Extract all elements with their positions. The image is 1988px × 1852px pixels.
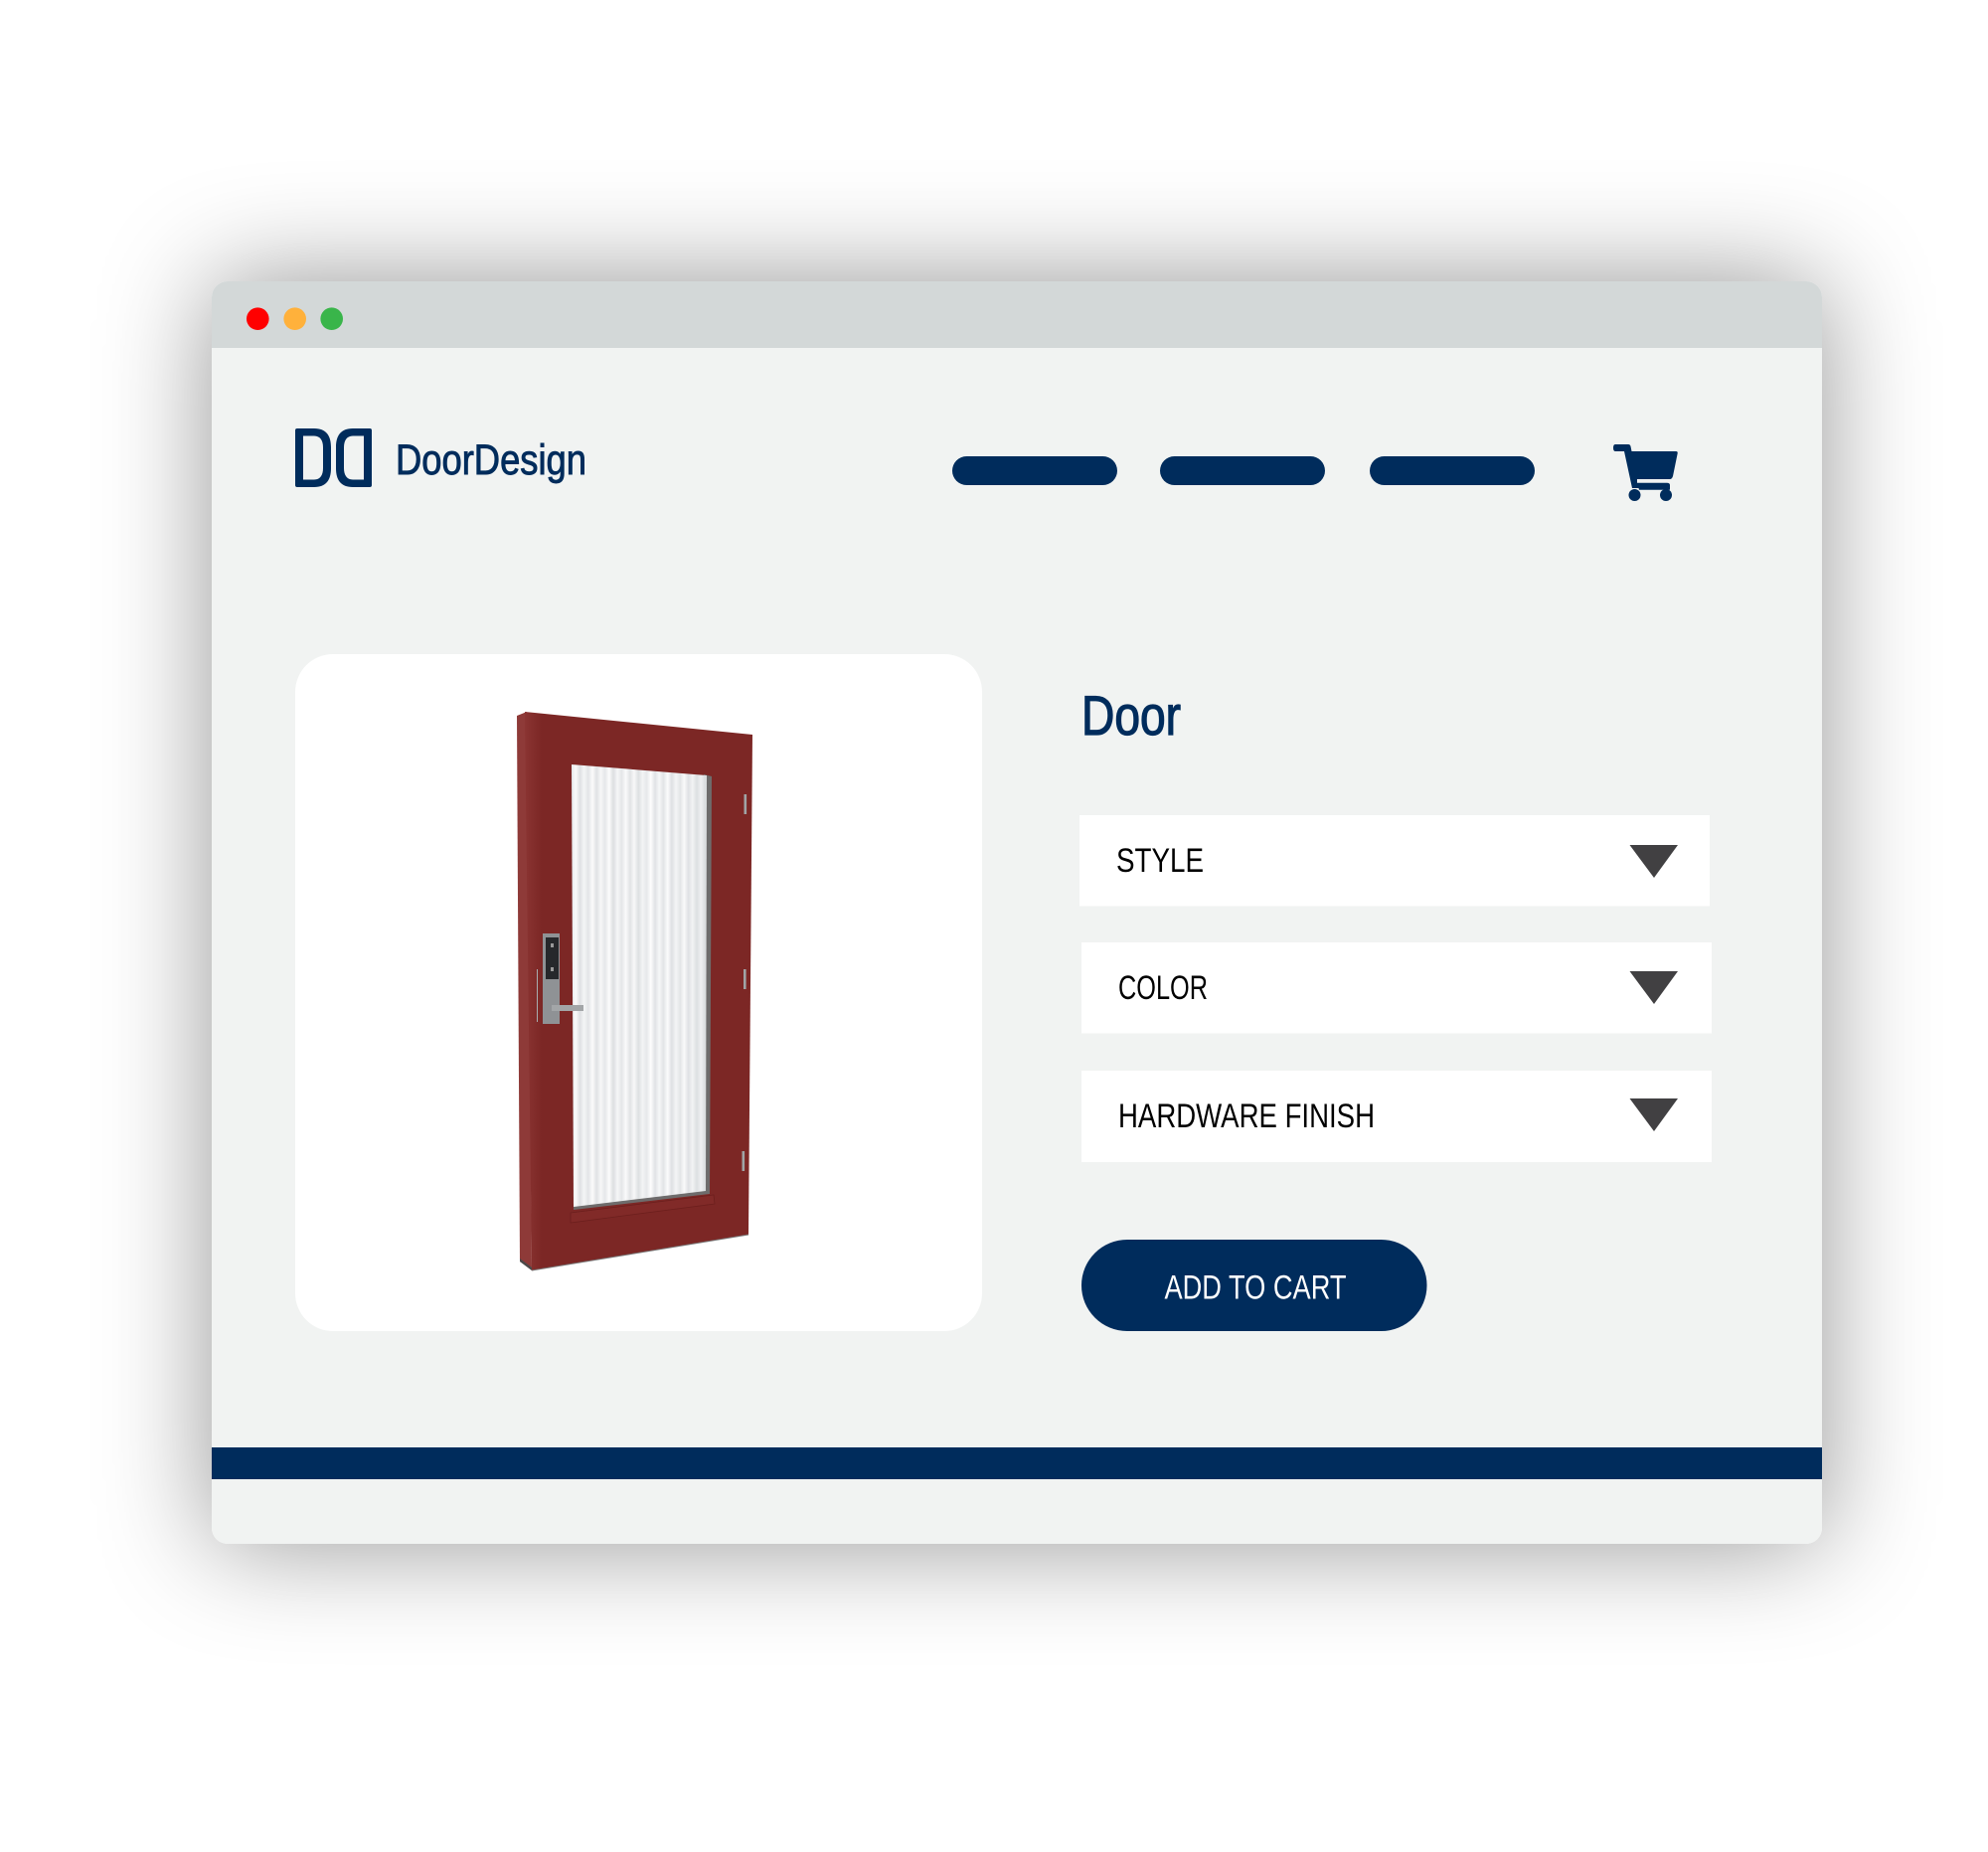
door illustration — [517, 712, 752, 1270]
footer bar — [212, 1447, 1822, 1479]
dropdown: hardware finish — [1081, 1071, 1712, 1162]
dropdown: style — [1079, 815, 1710, 907]
heading: Door: Door — [1081, 684, 1181, 747]
dropdown: color: COLOR — [1118, 969, 1208, 1007]
dropdown: color — [1081, 942, 1712, 1034]
icon: DD logo mark — [295, 428, 372, 487]
panel: product image — [295, 654, 982, 1331]
dropdown: hardware finish: HARDWARE FINISH — [1118, 1097, 1375, 1135]
navigation placeholders — [952, 456, 1535, 485]
door face — [525, 712, 752, 1270]
door side edge — [517, 712, 532, 1270]
logo — [295, 428, 586, 487]
icon: dropdown arrow — [1630, 1098, 1678, 1131]
icon: shopping cart — [1613, 444, 1678, 501]
icon: dropdown arrow — [1630, 845, 1678, 878]
window body — [212, 281, 1822, 1544]
dropdown: style: STYLE — [1116, 842, 1204, 880]
window drop shadow — [212, 281, 1822, 1544]
button: add to cart: ADD TO CART — [1165, 1268, 1346, 1306]
glass recess shadow — [574, 774, 712, 1210]
icon: dropdown arrow — [1630, 971, 1678, 1004]
window controls — [247, 307, 343, 330]
hinges — [742, 794, 746, 1171]
bottom sill — [571, 1195, 715, 1223]
bottom edge — [520, 1259, 532, 1270]
logo wordmark: DoorDesign — [396, 436, 586, 484]
lock and handle — [537, 933, 583, 1024]
title bar — [212, 281, 1822, 348]
browser window mockup — [212, 281, 1822, 1544]
glass panel — [572, 764, 707, 1207]
button: add to cart — [1081, 1240, 1427, 1331]
